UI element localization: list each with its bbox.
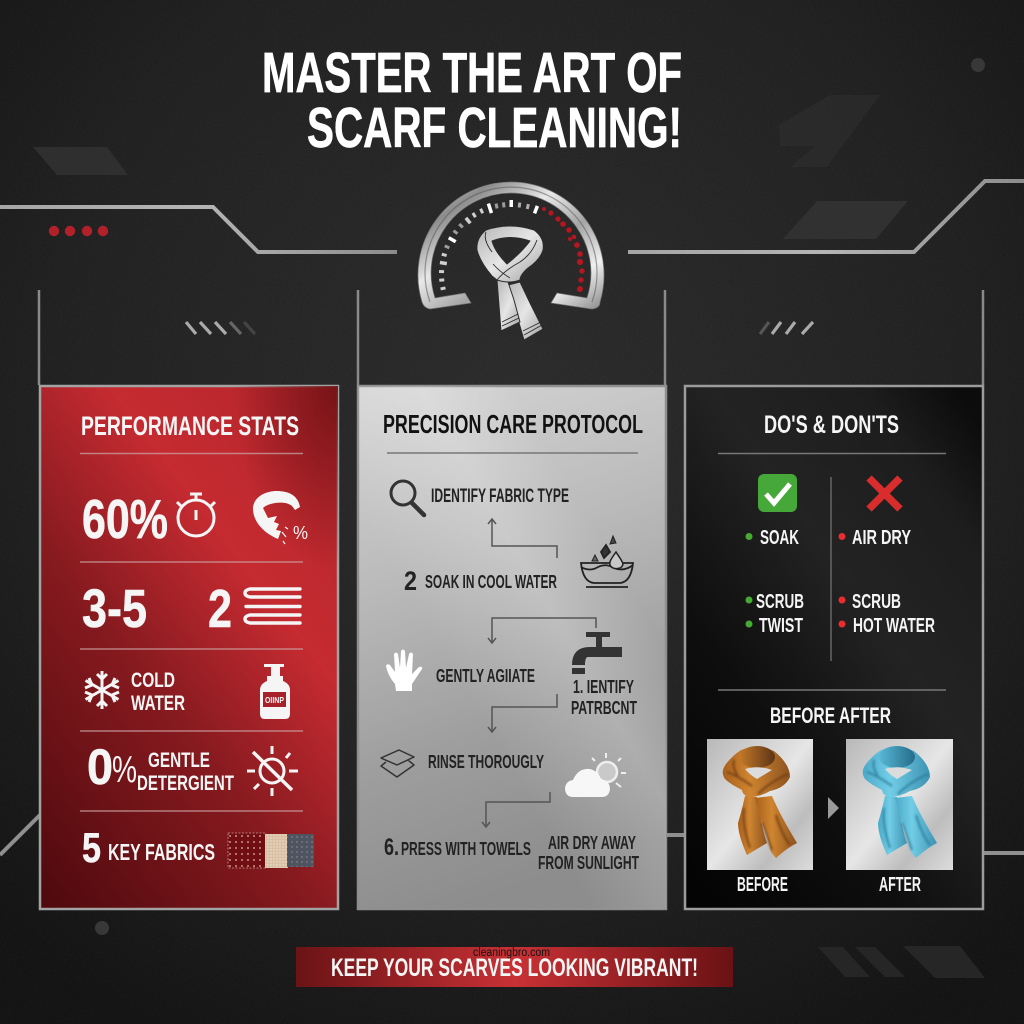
- stat: 60%: 60%: [82, 488, 168, 550]
- icon: magnifier: [391, 481, 424, 515]
- banner text: KEEP YOUR SCARVES LOOKING VIBRANT!: [331, 954, 698, 982]
- step: air dry: AIR DRY AWAY: [548, 833, 636, 853]
- label: faucet step: 1. IENTIFY: [573, 677, 634, 697]
- icon: no sun: [247, 746, 298, 796]
- icon: frayed scarf percent: %: [293, 523, 308, 543]
- list: don'ts: HOT WATER: [853, 615, 935, 637]
- step: press with towels: PRESS WITH TOWELS: [401, 839, 531, 859]
- step: press with towels: [384, 834, 531, 861]
- stat: 0%: 0: [87, 739, 113, 795]
- step: soak: SOAK IN COOL WATER: [425, 572, 557, 592]
- icon: sun and cloud: [565, 753, 626, 797]
- label: gentle detergent: [137, 749, 234, 795]
- step: soak: [404, 566, 557, 596]
- label: before: BEFORE: [737, 874, 788, 896]
- arrow: step 5 to step 6: [482, 792, 550, 827]
- icon: detergent bottle: OIINP: [265, 695, 284, 705]
- title: SCARF CLEANING!: [307, 96, 682, 160]
- step: air dry: FROM SUNLIGHT: [538, 853, 639, 873]
- label: cold water: WATER: [131, 692, 185, 715]
- icon: folded towels: [245, 589, 300, 623]
- arrow: before to after: [828, 797, 839, 819]
- icon: check: [758, 474, 797, 512]
- label: cold water: COLD: [131, 669, 175, 692]
- list: do's: TWIST: [759, 615, 803, 637]
- card: before scarf: [707, 739, 813, 870]
- icon: gauge with scarf: [418, 182, 604, 340]
- label: gentle detergent: DETERGIENT: [137, 772, 234, 795]
- scarf knot: [477, 226, 543, 340]
- stat: 3-5: 3-5: [82, 579, 147, 639]
- step: rinse thoroughly: RINSE THOROUGLY: [428, 752, 544, 772]
- heading: DO'S & DON'TS: [764, 411, 899, 439]
- heading: PERFORMANCE STATS: [81, 411, 299, 441]
- list: do's: SOAK: [760, 527, 799, 549]
- watermark: cleaningbro.com: [473, 947, 550, 959]
- icon: wash basin: [581, 536, 633, 587]
- icon: snowflake: [85, 671, 119, 709]
- panel: precision care protocol: [358, 386, 666, 909]
- stat: 5 key fabrics: [82, 824, 215, 871]
- title: [262, 41, 682, 160]
- card: after scarf: [846, 739, 953, 870]
- step: gently agitate: GENTLY AGIIATE: [436, 666, 535, 686]
- indicator dots: [49, 226, 108, 236]
- slash ticks left: [186, 322, 255, 334]
- step: press with towels: 6.: [384, 834, 399, 861]
- stat: 0%: %: [112, 749, 137, 791]
- label: cold water: [131, 669, 185, 715]
- icon: faucet: [572, 632, 622, 674]
- list: do's: SCRUB: [756, 591, 804, 613]
- icon: fabric swatches: [228, 833, 314, 868]
- panel: do's and don'ts: [685, 386, 983, 909]
- arrow: step 3 to step 4: [488, 694, 557, 732]
- icon: detergent bottle: [260, 664, 290, 719]
- title: MASTER THE ART OF: [262, 41, 682, 105]
- label: faucet step: PATRBCNT: [571, 698, 637, 718]
- panel: performance stats: [40, 386, 338, 909]
- icon: cross: [869, 478, 900, 509]
- stat: 5 key fabrics: 5: [82, 824, 101, 871]
- stat: 5 key fabrics: KEY FABRICS: [108, 839, 215, 865]
- slash ticks right: [760, 322, 813, 334]
- list: don'ts: AIR DRY: [852, 527, 911, 549]
- list: do's: [746, 527, 804, 637]
- step: air dry: [538, 833, 639, 873]
- stat: 0%: [87, 739, 137, 795]
- label: gentle detergent: GENTLE: [148, 749, 210, 772]
- label: after: AFTER: [879, 874, 921, 896]
- circuit lines: [0, 181, 1024, 855]
- icon: frayed scarf percent: [253, 491, 308, 544]
- icon: layered sheets: [381, 750, 414, 777]
- icon: stopwatch: [177, 494, 215, 536]
- list: don'ts: [838, 527, 935, 637]
- banner: [296, 947, 733, 987]
- heading: PRECISION CARE PROTOCOL: [383, 409, 643, 439]
- stat: 2: 2: [208, 579, 232, 639]
- step: identify fabric type: IDENTIFY FABRIC TYPE: [431, 486, 569, 507]
- step: soak: 2: [404, 566, 417, 596]
- arrow: step 2 to step 1: [488, 519, 557, 558]
- list: don'ts: SCRUB: [852, 591, 901, 613]
- label: faucet step: [571, 677, 637, 718]
- icon: hand: [386, 650, 422, 691]
- arrow: step 2 to step 3: [488, 618, 596, 643]
- heading: before after: BEFORE AFTER: [770, 703, 891, 728]
